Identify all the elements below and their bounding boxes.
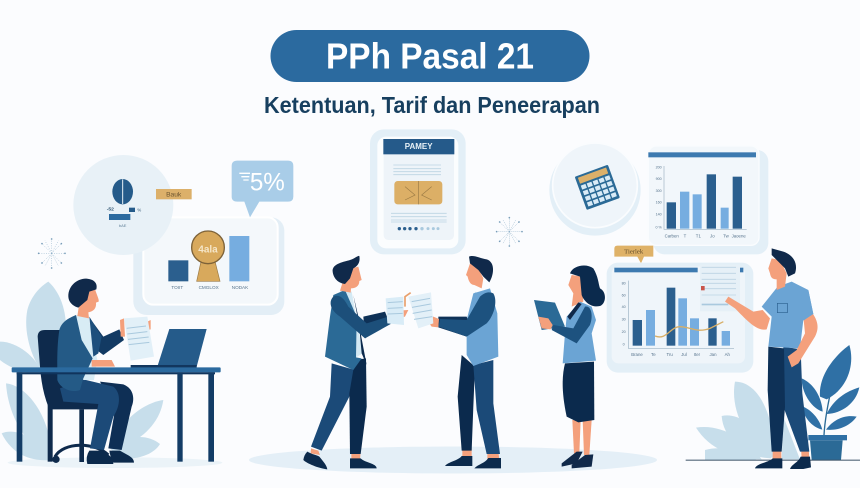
shared documents (386, 292, 433, 328)
bar panel with medal: CMGLOX (199, 285, 220, 290)
seated man (57, 279, 151, 464)
desk (12, 367, 221, 462)
right scene (549, 143, 860, 469)
bar chart bottom: 20 (622, 330, 626, 334)
tag: Tierlek: Tierlek (624, 249, 644, 256)
background plant right (696, 382, 800, 460)
chair (38, 330, 108, 463)
bar panel with medal (133, 217, 284, 315)
bar panel with medal: 4ala (198, 245, 218, 256)
bar panel with medal: NODAK (232, 285, 249, 290)
bar chart top: Tw (723, 234, 730, 239)
bar chart bottom: 40 (622, 305, 626, 309)
bar chart bottom: Jul (681, 352, 687, 357)
document card PAMEY: PAMEY (405, 142, 433, 151)
bar chart bottom: 60 (622, 293, 626, 297)
ground shadow left (8, 457, 222, 468)
centre scene (303, 129, 605, 469)
circle: tax figure: bAE (119, 223, 127, 228)
man with documents right (427, 256, 501, 468)
bar chart bottom: Brane (631, 352, 643, 357)
speech bubble 5% (232, 161, 293, 217)
calculator circle (549, 143, 641, 236)
bar chart top: Jaoene (732, 234, 746, 239)
circle: tax figure (73, 155, 173, 255)
ground line (686, 460, 860, 461)
title pill: PPh Pasal 21 (326, 36, 534, 76)
potted plant (802, 345, 859, 460)
man with documents left (303, 256, 408, 469)
bar chart top: 140 (656, 213, 662, 217)
bar chart top: Carben (665, 234, 679, 239)
bar chart bottom (607, 263, 753, 373)
bar chart top: Jo (710, 234, 715, 239)
sparkle burst centre (496, 217, 523, 247)
speech bubble 5%: 5% (250, 169, 285, 197)
circle: tax figure: % (137, 207, 141, 212)
bar chart bottom: Jan (710, 352, 717, 357)
bar panel with medal: TOIIT (171, 285, 183, 290)
document card PAMEY (370, 129, 466, 254)
circle: tax figure: -52 (107, 207, 114, 213)
bar chart top: 900 (656, 177, 662, 181)
bar chart bottom: 0 (623, 342, 625, 346)
bar chart bottom: Te (651, 352, 656, 357)
bar chart top: 300 (656, 189, 662, 193)
document held by seated man (124, 317, 154, 361)
bar chart top: 0 % (656, 225, 663, 229)
bar chart bottom: Tru (666, 352, 673, 357)
subtitle: Ketentuan, Tarif dan Peneerapan (264, 92, 600, 118)
tag: gold label (156, 189, 192, 199)
tag: Tierlek (614, 246, 653, 263)
bar chart top (648, 146, 768, 254)
bar chart top: 160 (656, 201, 662, 205)
bar chart bottom: Ah (725, 352, 731, 357)
bar chart bottom: Iter (694, 352, 701, 357)
ground ellipse: centre group (249, 446, 657, 474)
tag: gold label: Bauk (166, 192, 182, 199)
sparkle burst left (38, 238, 66, 269)
woman with tablet (534, 266, 605, 468)
laptop (131, 329, 207, 368)
left scene: employee at desk (0, 155, 293, 468)
bar chart top: T (684, 234, 687, 239)
presenting man (725, 248, 818, 469)
background plant left (0, 282, 163, 460)
title pill (270, 30, 590, 82)
bar chart bottom: 80 (622, 281, 626, 285)
bar chart top: 200 (656, 165, 662, 169)
icon: calculator (575, 165, 620, 210)
bar chart bottom: 30 (622, 317, 626, 321)
bar chart top: T1 (696, 234, 701, 239)
